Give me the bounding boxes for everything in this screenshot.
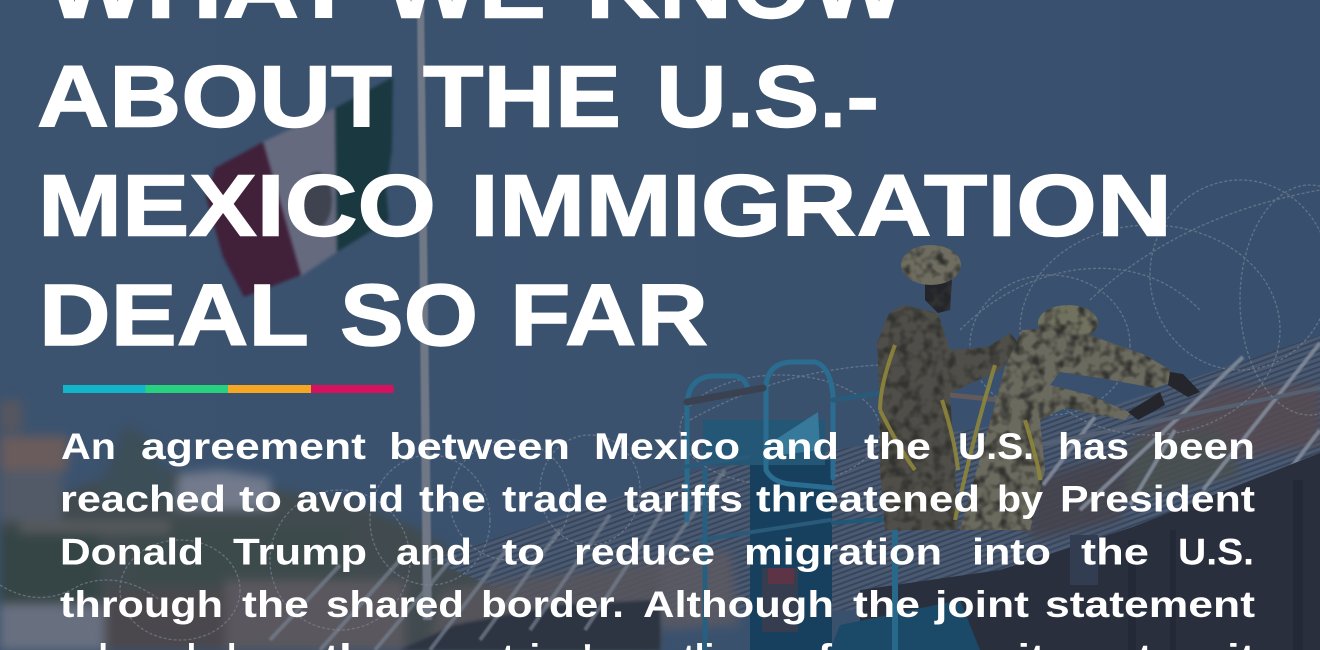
paragraph line 1: agreement [141, 426, 366, 467]
title line 2 [37, 49, 879, 146]
paragraph line 5, cropped at bottom edge [60, 637, 1255, 650]
paragraph line 4: through [60, 584, 223, 625]
background photo: fence posts right [1043, 343, 1320, 510]
title line 4: FAR [510, 267, 708, 364]
background photo: Mexican flag [206, 77, 393, 297]
title [37, 0, 1172, 364]
background photo: gloves [1128, 372, 1200, 420]
paragraph line 2: the [419, 479, 486, 520]
paragraph line 3: reduce [574, 531, 715, 572]
background photo: razor wire [0, 180, 1320, 640]
paragraph line 1: Mexico [594, 426, 740, 467]
background photo: dark wall [860, 453, 1320, 650]
paragraph line 2: avoid [296, 479, 404, 520]
paragraph line 2: to [239, 479, 282, 520]
paragraph line 4: joint [934, 584, 1029, 625]
paragraph line 1: and [762, 426, 839, 467]
title line 4: DEAL [39, 267, 309, 364]
paragraph line 3: into [972, 531, 1051, 572]
paragraph line 3: Donald [60, 531, 204, 572]
paragraph line 1: been [1152, 426, 1255, 467]
paragraph line 2 [60, 479, 1255, 520]
paragraph line 4: statement [1045, 584, 1255, 625]
background photo: central and right fence mesh [430, 335, 1320, 615]
paragraph line 4: shared [326, 584, 464, 625]
paragraph line 2: trade [502, 479, 608, 520]
background photo: hillside and buildings [0, 400, 660, 650]
title line 3 [38, 158, 1172, 255]
multicolour divider bar [63, 385, 394, 393]
title line 2: ABOUT [37, 49, 392, 146]
paragraph line 3 [60, 531, 1254, 572]
paragraph line 3: to [502, 531, 545, 572]
title line 3: IMMIGRATION [470, 158, 1172, 255]
paragraph line 3: the [1081, 531, 1149, 572]
paragraph line 4 [60, 584, 1255, 625]
paragraph line 4: Although [643, 584, 834, 625]
title line 4: SO [340, 267, 478, 364]
background photo: soldier right [960, 305, 1180, 530]
paragraph line 2: President [1060, 479, 1255, 520]
paragraph line 2: tariffs [624, 479, 743, 520]
paragraph line 3: Trump [233, 531, 367, 572]
title line 3: MEXICO [38, 158, 436, 255]
background photo: lift platform [683, 362, 1030, 650]
paragraph line 1: An [61, 426, 116, 467]
paragraph line 4: border. [481, 584, 624, 625]
background photo: wall patch [1070, 535, 1098, 585]
title line 1 [46, 0, 907, 36]
background photo: yellow safety harness [880, 345, 1040, 520]
paragraph line 1 [61, 426, 1255, 467]
title line 2: THE [423, 49, 621, 146]
paragraph line 1: the [864, 426, 931, 467]
background photo: flag pole [417, 0, 432, 620]
paragraph line 3: migration [744, 531, 942, 572]
title line 2: U.S.- [656, 49, 879, 146]
paragraph line 3: U.S. [1178, 531, 1254, 572]
body paragraph [60, 426, 1255, 650]
title line 4 [39, 267, 708, 364]
paragraph line 1: U.S. [958, 426, 1034, 467]
background photo: dark foreground wedge left [400, 600, 660, 650]
background photo: soldier left [877, 245, 1020, 530]
paragraph line 3: and [396, 531, 472, 572]
paragraph line 2: threatened [756, 479, 980, 520]
paragraph line 1: between [389, 426, 570, 467]
background photo: fence posts left [270, 470, 725, 650]
paragraph line 2: reached [60, 479, 226, 520]
background photo: top fence rail [1040, 388, 1320, 445]
paragraph line 4: the [242, 584, 309, 625]
background photo: blurred buildings behind fence [430, 385, 1320, 640]
paragraph line 1: has [1058, 426, 1129, 467]
paragraph line 2: by [997, 479, 1043, 520]
paragraph line 4: the [853, 584, 920, 625]
background photo: wall columns [1128, 480, 1303, 650]
